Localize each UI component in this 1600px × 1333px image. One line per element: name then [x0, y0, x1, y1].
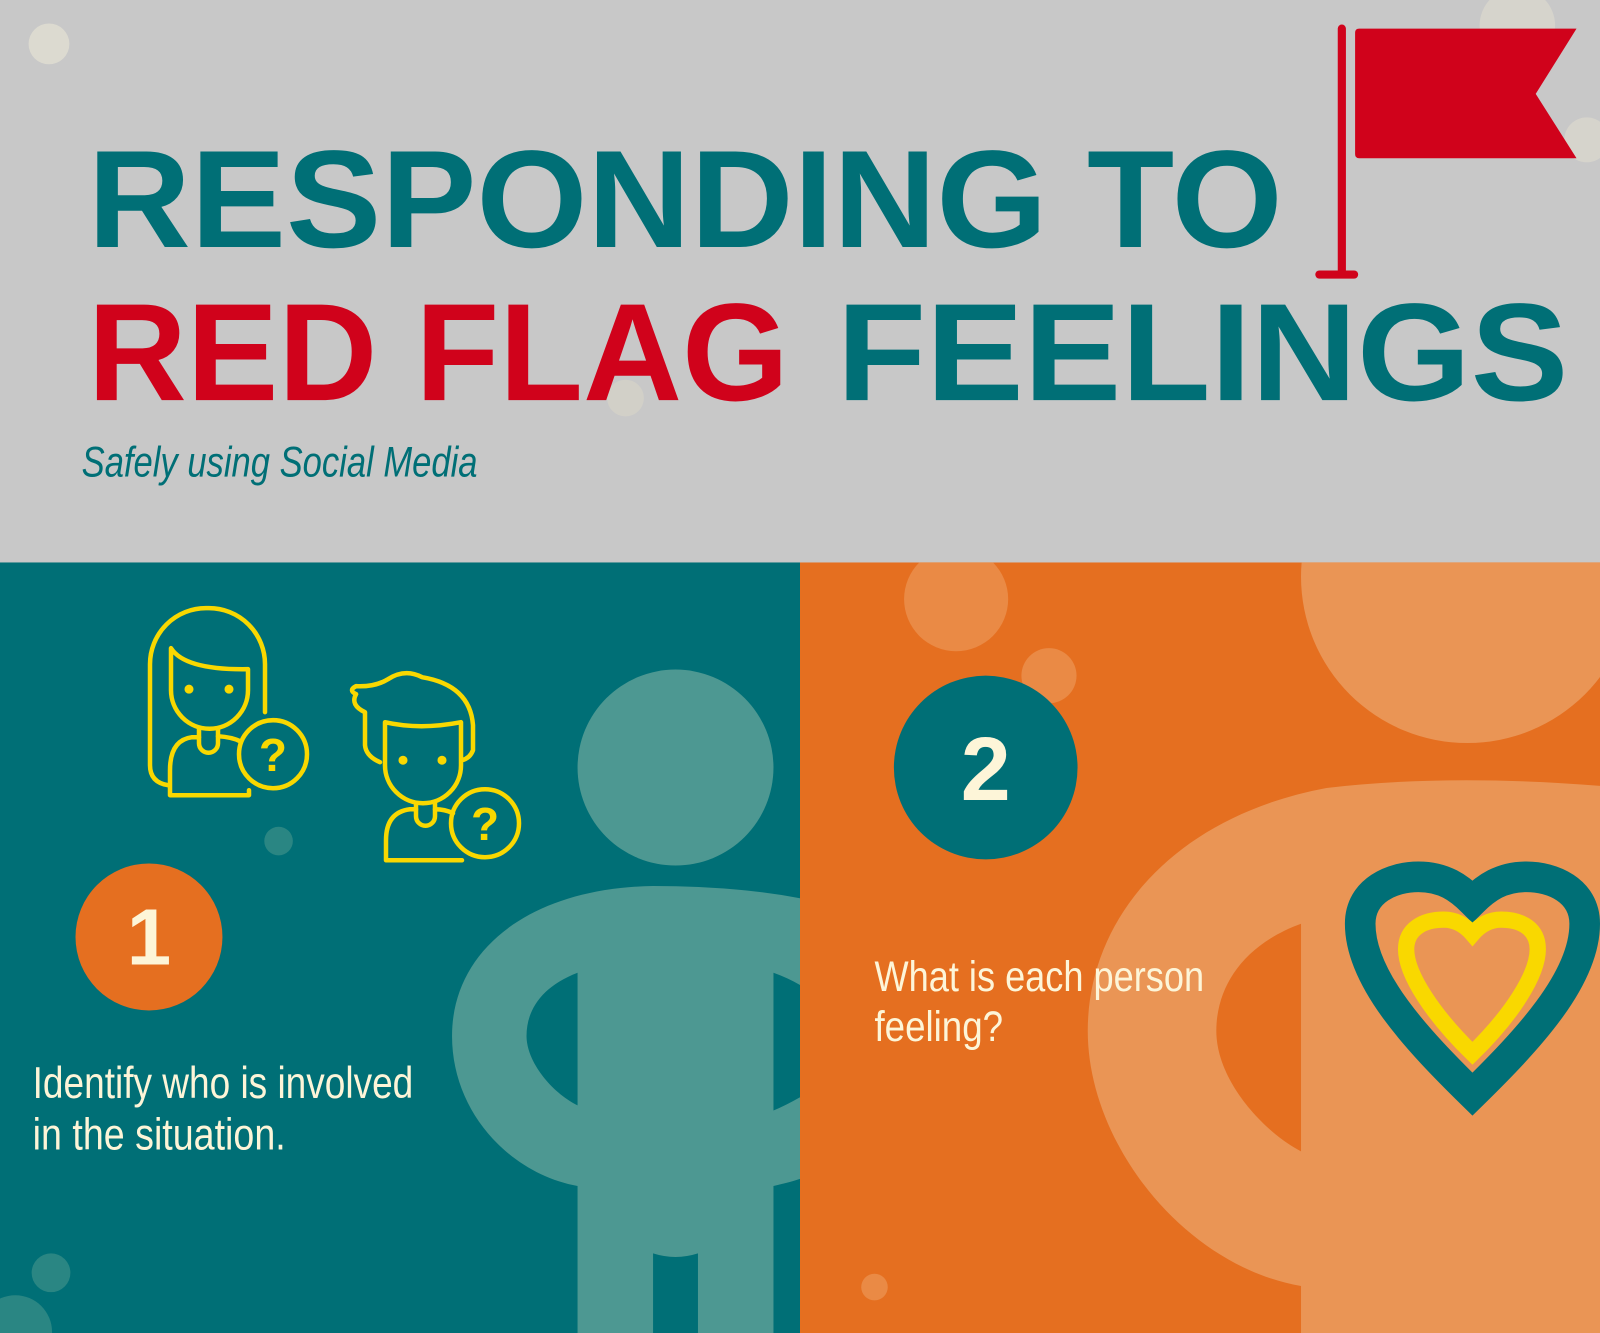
subtitle: Safely using Social Media [82, 439, 478, 487]
title: FEELINGS [837, 275, 1568, 430]
icon: hearts [1360, 877, 1585, 1094]
header background [0, 0, 1600, 562]
panel: step 1: ? [259, 729, 287, 781]
panel: step 2 [800, 562, 1600, 1333]
icon: people with question marks [150, 608, 519, 860]
number badge 1: 1 [127, 893, 171, 982]
title: RESPONDING TO [88, 122, 1283, 277]
number badge 2 [894, 676, 1078, 859]
figure silhouette [452, 670, 800, 1333]
title [88, 122, 1568, 430]
text: step 1: Identify who is involved [33, 1057, 413, 1108]
text: step 2: What is each person [874, 953, 1204, 1001]
panel: step 1 [0, 562, 800, 1333]
figure silhouette [1088, 780, 1600, 1333]
text: step 1 [35, 1066, 411, 1150]
text: step 2: feeling? [874, 1003, 1003, 1051]
text: step 1: in the situation. [33, 1108, 286, 1159]
text: step 2 [874, 953, 1204, 1051]
title: RED FLAG [88, 275, 789, 430]
number badge 2: 2 [961, 720, 1011, 820]
icon: red flag [1315, 24, 1577, 279]
number badge 1 [76, 863, 222, 1010]
panel: step 1: ? [471, 798, 499, 850]
